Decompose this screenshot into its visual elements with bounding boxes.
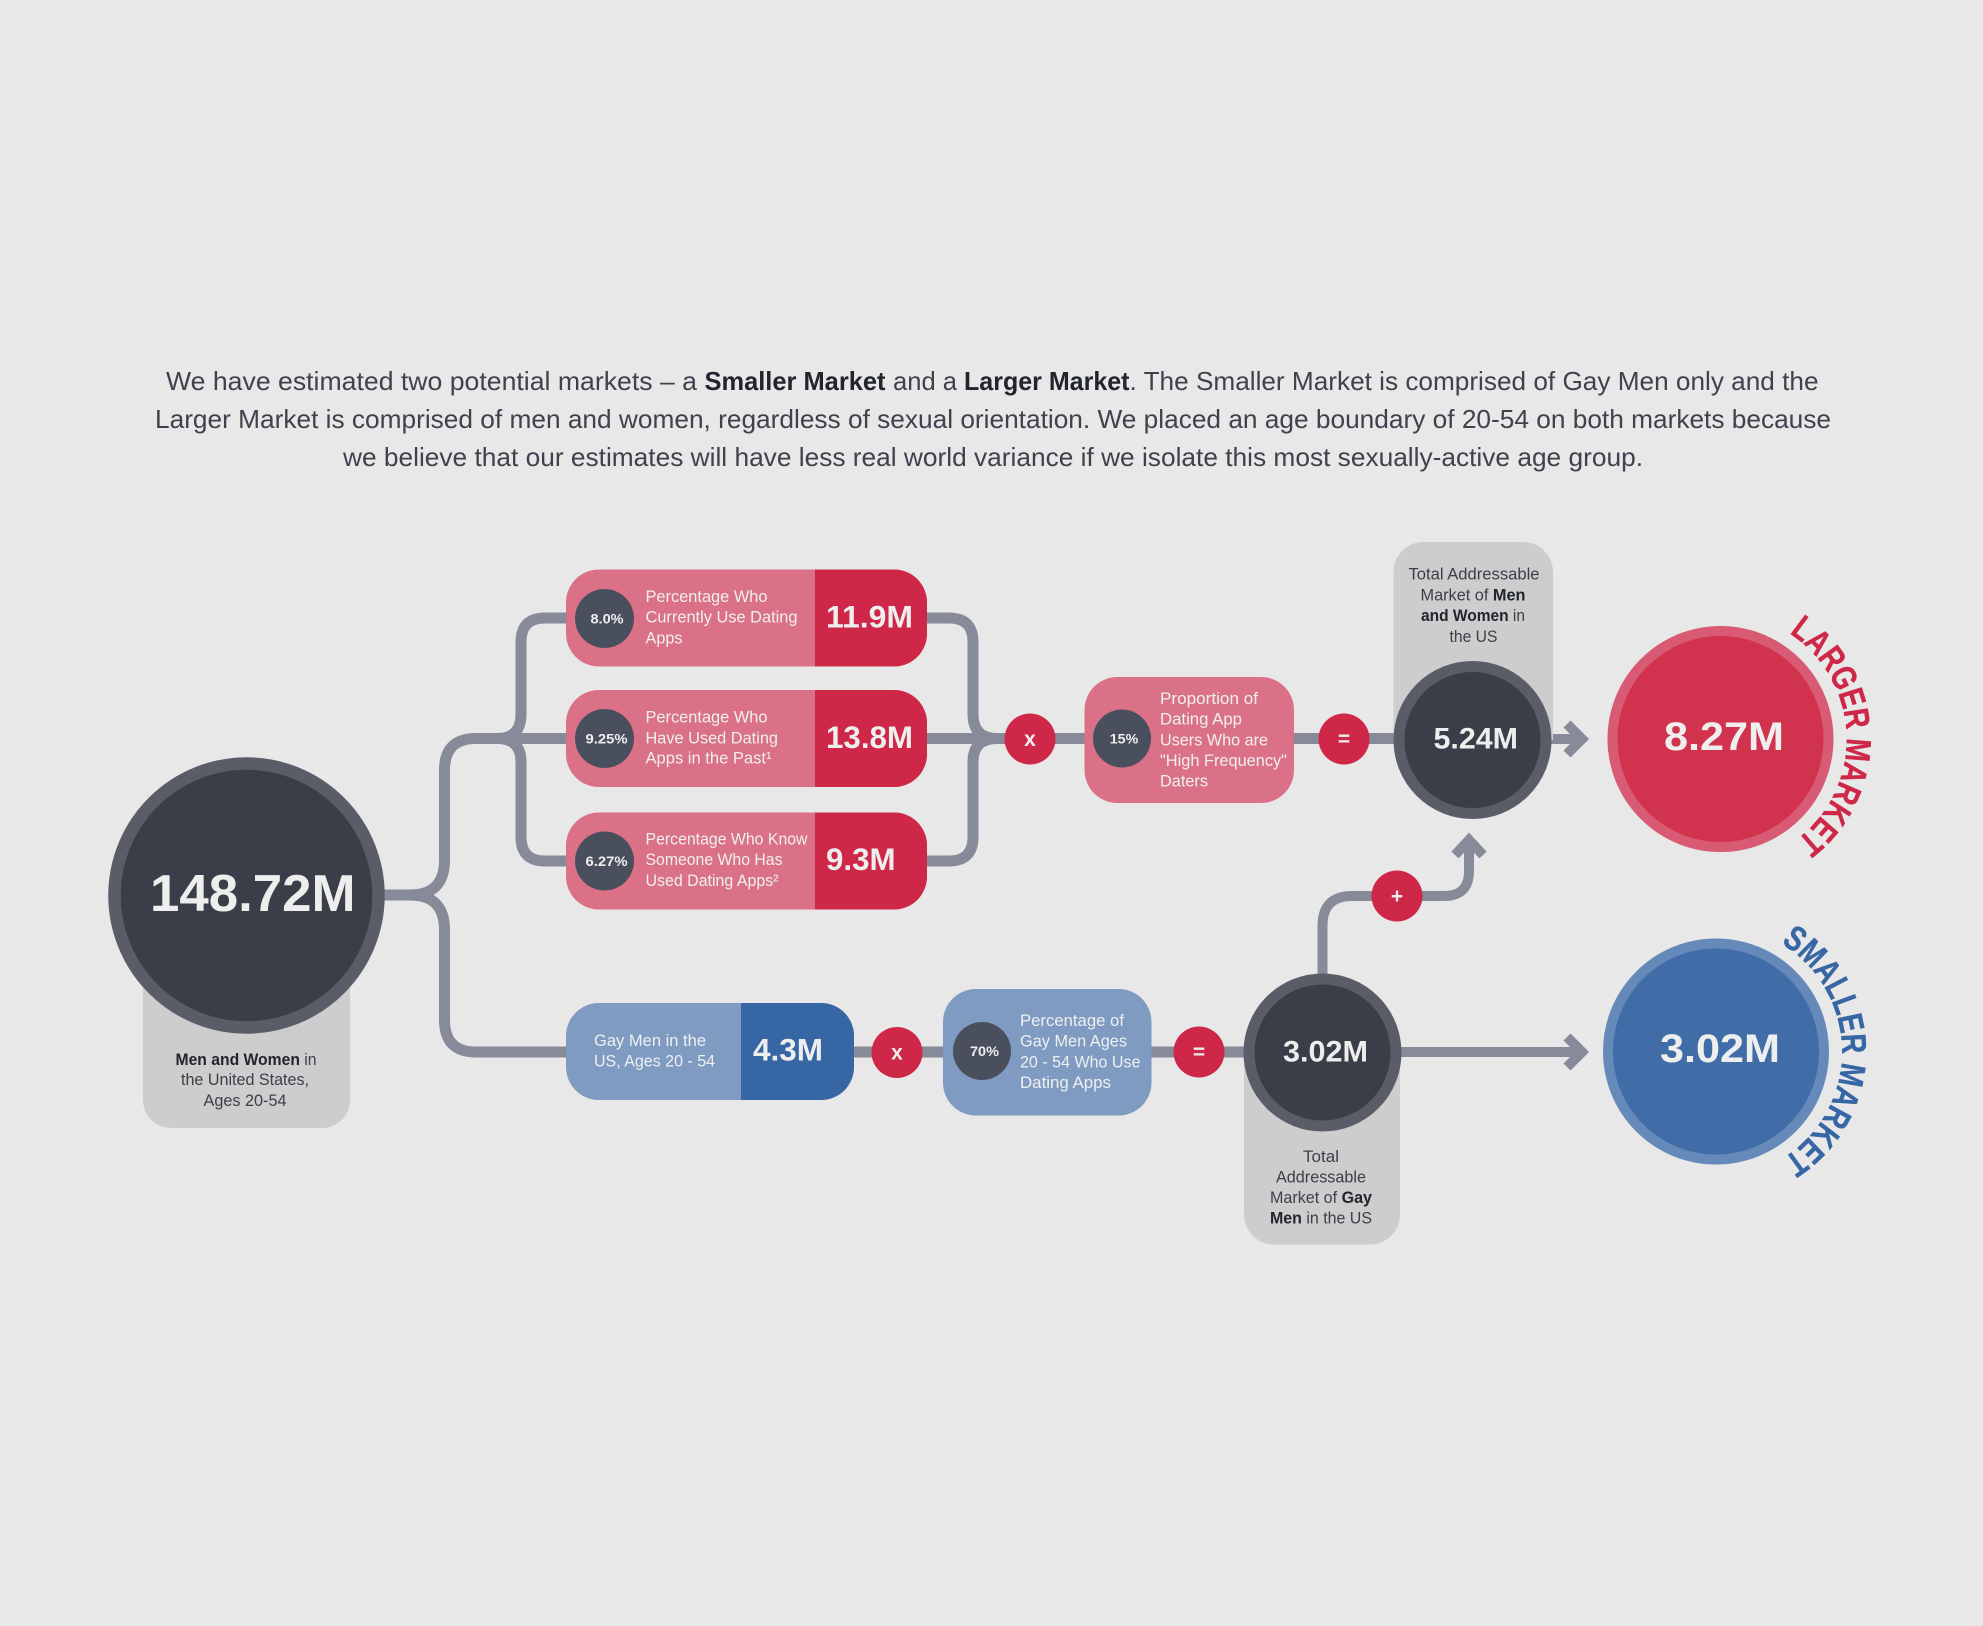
panel: total addressable men and women label: Market of Men	[1420, 586, 1526, 604]
box: high frequency daters: 15%	[1110, 732, 1138, 746]
pill: have used dating apps: Apps in the Past¹	[646, 750, 772, 768]
connector: total market to upper and lower branches	[384, 618, 566, 1052]
operator: multiply upper: x	[1024, 728, 1036, 751]
box: high frequency daters: Users Who are	[1160, 732, 1268, 750]
curved label: smaller market: SMALLER MARKET	[1784, 926, 1866, 1178]
pill: have used dating apps: Percentage Who	[646, 708, 768, 726]
intro text: and a	[893, 366, 958, 396]
intro text: Larger Market	[964, 366, 1130, 396]
box: high frequency daters: Proportion of	[1160, 690, 1258, 708]
operator: equals upper: =	[1338, 728, 1350, 751]
box: high frequency daters: Daters	[1160, 772, 1208, 790]
pill: know someone using dating apps: Someone Who Has	[646, 851, 782, 869]
pill: have used dating apps	[566, 690, 927, 787]
circle: larger market 8.27M: 8.27M	[1664, 715, 1784, 759]
box: gay men using dating apps: 70%	[970, 1044, 999, 1059]
box: gay men using dating apps: Gay Men Ages	[1020, 1032, 1127, 1050]
pill: know someone using dating apps: 6.27%	[586, 854, 628, 869]
panel: total population label: Ages 20-54	[204, 1092, 286, 1110]
circle: smaller market 3.02M	[1608, 944, 1824, 1160]
pill: have used dating apps: 9.25%	[586, 732, 628, 746]
arrow: 3.02M to smaller market	[1395, 1037, 1582, 1067]
pill: gay men in the US	[566, 1003, 854, 1100]
panel: total population label	[143, 960, 350, 1128]
operator: plus	[1372, 870, 1422, 922]
panel: total addressable gay men label: Addressable	[1276, 1168, 1366, 1186]
panel: total addressable men and women label: the US	[1450, 628, 1498, 646]
curved label: larger market: LARGER MARKET	[1790, 614, 1872, 858]
box: high frequency daters	[1084, 677, 1294, 803]
panel: total addressable gay men label: Market of Gay	[1270, 1189, 1373, 1207]
pill: currently use dating apps: 11.9M	[826, 598, 913, 634]
circle: smaller market 3.02M: 3.02M	[1660, 1027, 1780, 1071]
operator: multiply lower	[872, 1027, 922, 1078]
operator: equals lower: =	[1193, 1041, 1205, 1064]
operator: equals upper	[1318, 714, 1370, 764]
panel: total addressable gay men label	[1244, 1052, 1400, 1245]
panel: total addressable gay men label: Total	[1303, 1148, 1339, 1166]
connector: rates to multiply step	[927, 618, 1400, 861]
pill: know someone using dating apps: Used Dating Apps²	[646, 872, 779, 890]
box: gay men using dating apps: 20 - 54 Who Use	[1020, 1054, 1140, 1072]
box: gay men using dating apps: Percentage of	[1020, 1012, 1124, 1030]
panel: total addressable men and women label	[1394, 542, 1553, 740]
pill: currently use dating apps	[566, 570, 927, 666]
circle: 3.02M	[1249, 979, 1396, 1126]
operator: plus: +	[1391, 885, 1403, 908]
circle: 3.02M: 3.02M	[1283, 1036, 1368, 1068]
box: high frequency daters: Dating App	[1160, 710, 1242, 728]
box: gay men using dating apps: Dating Apps	[1020, 1074, 1111, 1092]
pill: know someone using dating apps: 9.3M	[826, 841, 896, 877]
pill: gay men in the US: 4.3M	[753, 1032, 823, 1068]
panel: total addressable men and women label: Total Addressable	[1408, 566, 1540, 584]
pill: have used dating apps: 13.8M	[826, 719, 913, 755]
pill: know someone using dating apps	[566, 812, 927, 910]
intro text: we believe that our estimates will have less real world variance if we isolate this most sexually-active age group.	[342, 442, 1643, 472]
circle: 148.72M	[114, 764, 378, 1028]
pill: currently use dating apps: Percentage Who	[646, 588, 768, 606]
operator: multiply upper	[1004, 714, 1056, 764]
intro text: We have estimated two potential markets – a	[166, 366, 698, 396]
intro text	[155, 366, 1831, 472]
intro text: Larger Market is comprised of men and women, regardless of sexual orientation. We placed an age boundary of 20-54 on both markets because	[155, 404, 1831, 434]
circle: 5.24M: 5.24M	[1434, 722, 1518, 756]
panel: total population label: the United States,	[181, 1071, 309, 1089]
arrow: 5.24M to larger market	[1545, 724, 1582, 754]
pill: gay men in the US: US, Ages 20 - 54	[594, 1052, 715, 1070]
pill: currently use dating apps: Apps	[646, 630, 682, 648]
panel: total population label: Men and Women in	[176, 1051, 316, 1069]
pill: know someone using dating apps: Percentage Who Know	[646, 830, 808, 848]
circle: 5.24M	[1399, 666, 1546, 814]
panel: total addressable gay men label: Men in the US	[1270, 1210, 1372, 1228]
circle: larger market 8.27M	[1612, 631, 1828, 847]
arrow: 3.02M up to 5.24M	[1322, 840, 1483, 985]
box: high frequency daters: "High Frequency"	[1160, 752, 1287, 770]
intro text: Smaller Market	[704, 366, 886, 396]
pill: currently use dating apps: 8.0%	[590, 612, 624, 626]
operator: multiply lower: x	[891, 1042, 903, 1064]
connector: gay men row	[853, 1046, 1250, 1058]
intro text: . The Smaller Market is comprised of Gay Men only and the	[1130, 366, 1818, 396]
pill: currently use dating apps: Currently Use Dating	[646, 608, 798, 626]
operator: equals lower	[1174, 1026, 1224, 1078]
circle: 148.72M: 148.72M	[150, 864, 356, 922]
pill: have used dating apps: Have Used Dating	[646, 730, 778, 748]
panel: total addressable men and women label: and Women in	[1421, 607, 1525, 625]
pill: gay men in the US: Gay Men in the	[594, 1032, 706, 1050]
box: gay men using dating apps	[943, 989, 1152, 1116]
